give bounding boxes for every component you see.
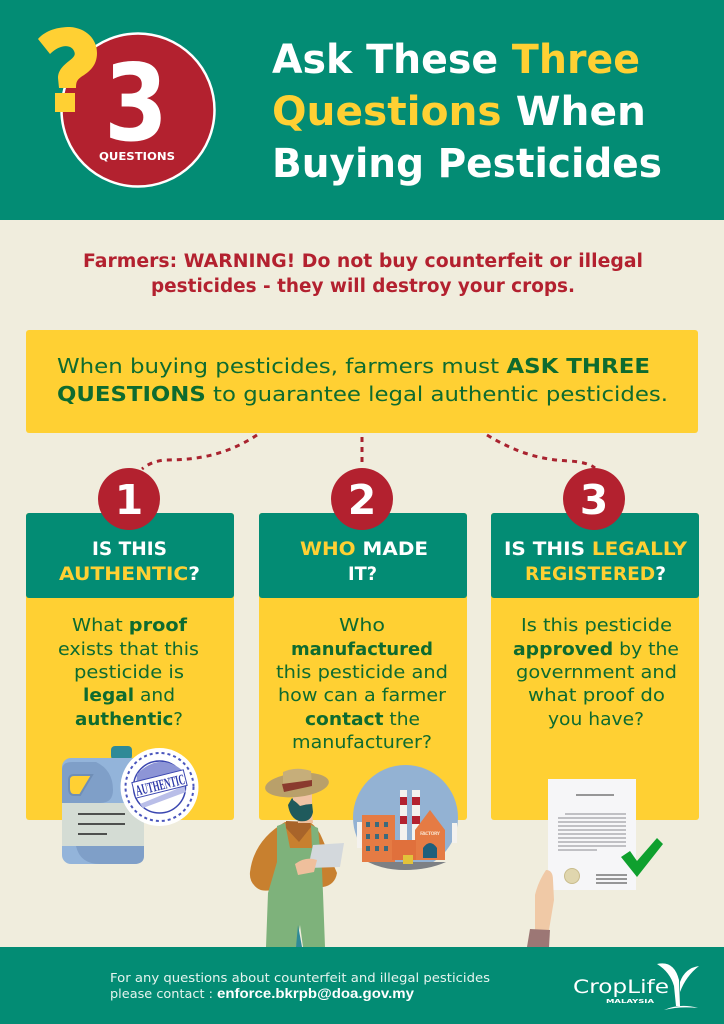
icon: pesticide jug with authentic stamp [62,746,198,864]
body 2: manufactured [291,639,433,660]
heading 2: IT? [348,563,377,585]
number badge 1: 1 [115,476,143,524]
badge: 3 questions [38,27,214,186]
title [272,37,662,187]
intro panel: QUESTIONS to guarantee legal authentic pesticides. [57,382,668,406]
contact text [110,970,490,1001]
badge: 3 questions: 3 [104,42,168,165]
heading 3 [504,538,687,585]
title: Questions When [272,89,646,135]
heading 2: WHO MADE [300,538,428,560]
warning text: Farmers: WARNING! Do not buy counterfeit or illegal [83,251,643,272]
logo: CropLife Malaysia: CropLife [573,976,669,998]
body 1: pesticide is [74,662,184,683]
intro panel: When buying pesticides, farmers must ASK THREE [57,354,650,378]
contact text: enforce.bkrpb@doa.gov.my [217,985,414,1001]
body 3: what proof do [528,685,665,706]
body 1: legal and [83,685,175,706]
warning text [83,251,643,297]
heading 1: AUTHENTIC ? [59,563,200,585]
body 1: What proof [72,615,187,636]
stamp: AUTHENTIC [134,772,187,800]
body 3: you have? [548,709,644,730]
logo: CropLife Malaysia: MALAYSIA [606,999,655,1005]
body 2 [276,615,448,753]
body 1 [58,615,199,730]
body 1: authentic? [75,709,183,730]
heading 1: IS THIS [92,538,167,560]
dotted connectors [142,435,595,469]
body 1: exists that this [58,639,199,660]
heading 3: REGISTERED? [525,563,666,585]
body 2: manufacturer? [292,732,432,753]
body 3: approved by the [513,639,679,660]
footer band [0,947,724,1024]
panel: question 2 [259,468,467,820]
body 2: Who [339,615,385,636]
heading 2 [300,538,428,585]
logo: CropLife Malaysia [573,963,699,1010]
intro panel [26,330,698,433]
body 2: this pesticide and [276,662,448,683]
body 2: contact the [305,709,420,730]
warning text: pesticides - they will destroy your crops. [151,276,575,297]
icon: farmer with tablet [250,769,344,947]
body 2: how can a farmer [278,685,447,706]
number badge 2: 2 [348,476,376,524]
body 3 [513,615,679,730]
heading 3: IS THIS LEGALLY [504,538,687,560]
number badge 3: 3 [580,476,608,524]
title: Ask These Three [272,37,640,83]
icon: question mark [38,27,97,112]
number badge 3 [563,468,625,530]
icon: hand holding document with check [527,779,663,947]
panel: question 3 [491,468,699,820]
badge: 3 questions: QUESTIONS [99,150,175,163]
title: Buying Pesticides [272,141,662,187]
number badge 1 [98,468,160,530]
panel: question 1 [26,468,234,820]
body 3: Is this pesticide [521,615,672,636]
heading 1 [59,538,200,585]
body 3: government and [516,662,677,683]
number badge 2 [331,468,393,530]
contact text: For any questions about counterfeit and illegal pesticides [110,970,490,985]
header band [0,0,724,220]
icon: factory [353,765,458,870]
icon: factory: FACTORY [420,831,441,837]
contact text: please contact : [110,986,213,1001]
